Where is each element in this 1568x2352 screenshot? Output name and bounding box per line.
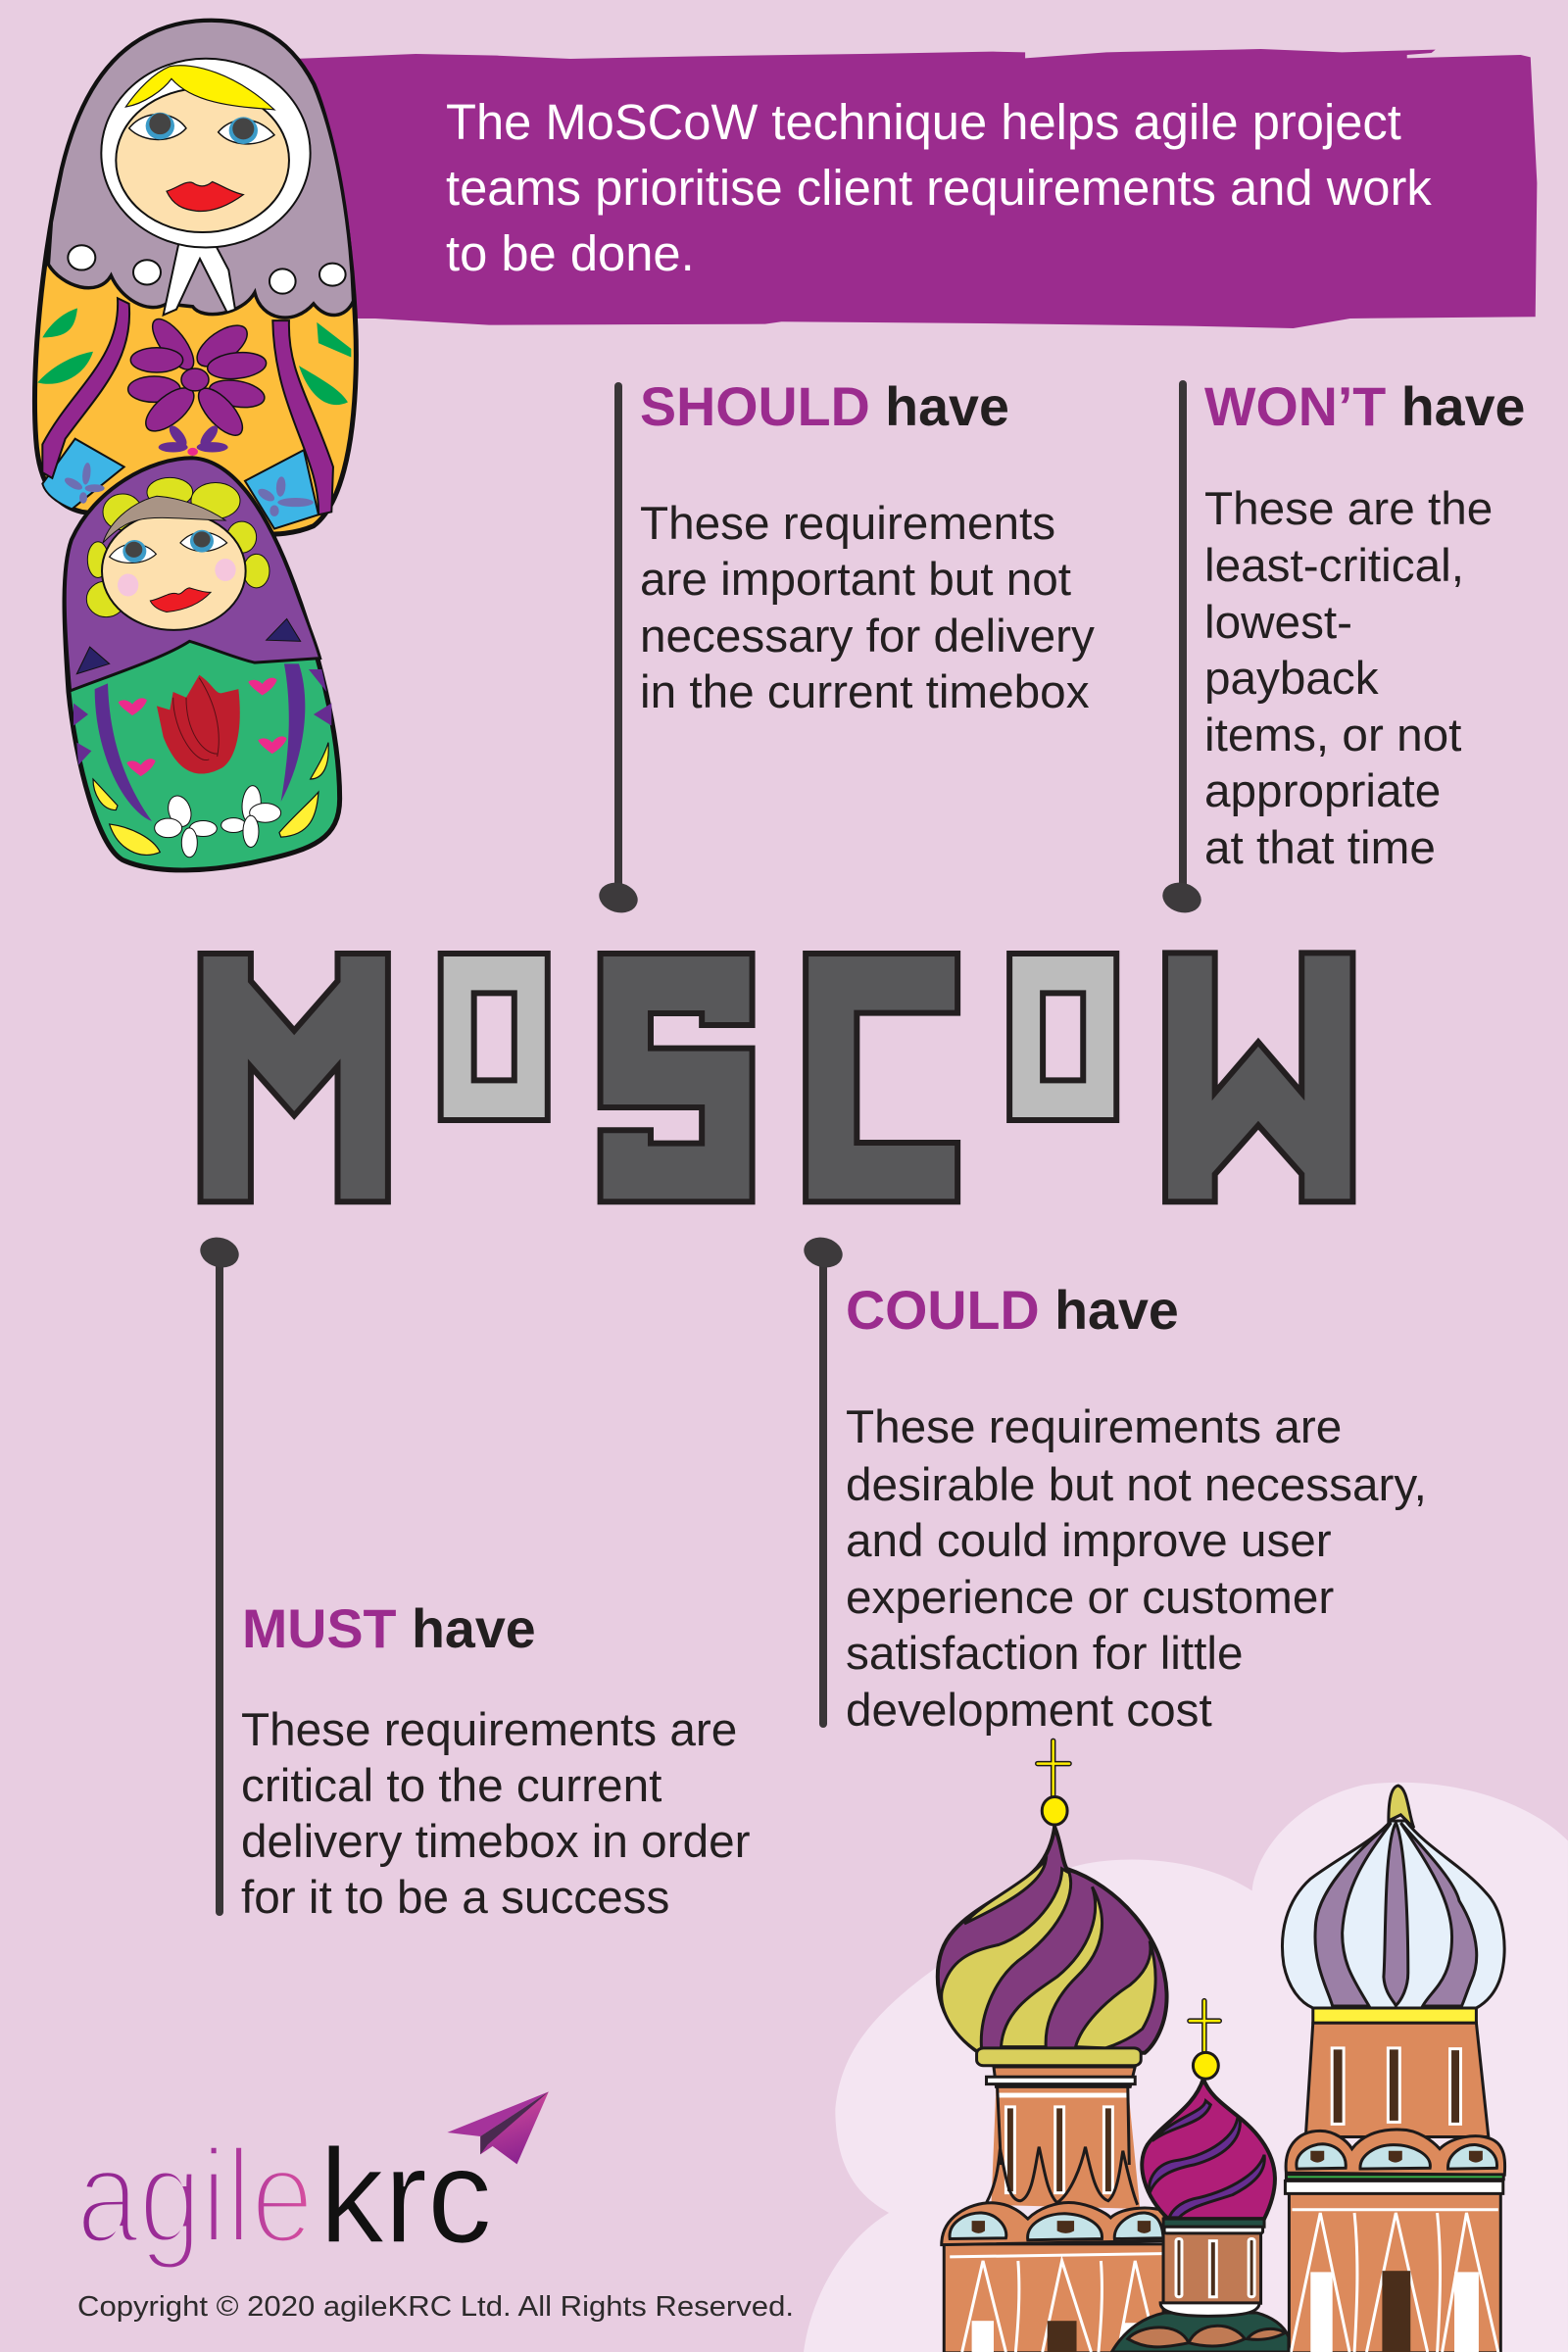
panel: intro banner <box>294 49 1537 328</box>
title: MoSCoW block letters <box>201 953 1352 1201</box>
body: wont: at that time <box>1204 822 1436 874</box>
letter M <box>201 954 388 1201</box>
intro text: teams prioritise client requirements and work <box>446 160 1432 216</box>
body: must: critical to the current <box>241 1760 662 1812</box>
icon: small matryoshka doll <box>65 459 340 870</box>
logo word krc: krc <box>319 2122 492 2272</box>
body: wont: appropriate <box>1204 765 1441 817</box>
heading: could: COULD have <box>846 1280 1179 1341</box>
right tower <box>1282 1786 1505 2352</box>
body: could: These requirements are <box>846 1401 1342 1453</box>
body: should: These requirements <box>640 498 1055 550</box>
pin: could <box>801 1233 846 1724</box>
icon: paper plane <box>447 2091 549 2164</box>
body: must: for it to be a success <box>241 1872 669 1924</box>
body: could: development cost <box>846 1685 1212 1737</box>
pin: wont <box>1159 384 1204 917</box>
body: should: in the current timebox <box>640 666 1090 718</box>
letter C <box>806 954 957 1201</box>
body: wont: items, or not <box>1204 710 1461 761</box>
body: must: These requirements are <box>241 1704 737 1756</box>
body: should: necessary for delivery <box>640 611 1095 662</box>
body: wont: These are the <box>1204 483 1493 535</box>
body: could: desirable but not necessary, <box>846 1459 1427 1511</box>
callout: MUST have <box>197 1233 751 1924</box>
icon: large matryoshka doll <box>35 21 356 534</box>
intro text: The MoSCoW technique helps agile project <box>446 94 1401 150</box>
logo: agileKRC <box>76 2091 549 2272</box>
callout: COULD have <box>801 1233 1427 1737</box>
heading: should: SHOULD have <box>640 376 1009 437</box>
body: could: experience or customer <box>846 1572 1334 1624</box>
cloud backdrop <box>804 1783 1568 2352</box>
logo word agile: agile <box>76 2122 314 2272</box>
intro text: to be done. <box>446 225 695 281</box>
heading: must: MUST have <box>242 1598 536 1659</box>
heading: wont: WON’T have <box>1204 376 1525 437</box>
body: wont: least-critical, <box>1204 540 1464 592</box>
callout: SHOULD have <box>596 376 1095 917</box>
letter small o <box>441 954 548 1120</box>
body: should: are important but not <box>640 554 1071 606</box>
left tower <box>938 1740 1167 2352</box>
copyright: Copyright © 2020 agileKRC Ltd. All Rights Reserved. <box>77 2291 794 2323</box>
callout: WON'T have <box>1159 376 1525 917</box>
letter W <box>1165 953 1352 1201</box>
body: could: satisfaction for little <box>846 1628 1244 1680</box>
body: must: delivery timebox in order <box>241 1816 751 1868</box>
letter small o second <box>1009 954 1116 1120</box>
icon: onion-dome cathedral <box>938 1740 1505 2352</box>
letter S <box>601 954 753 1201</box>
centre tower <box>1111 2001 1289 2352</box>
body: could: and could improve user <box>846 1515 1332 1567</box>
pin: must <box>197 1233 242 1912</box>
pin: should <box>596 386 641 917</box>
body: wont: lowest- <box>1204 597 1352 649</box>
body: wont: payback <box>1204 653 1379 705</box>
